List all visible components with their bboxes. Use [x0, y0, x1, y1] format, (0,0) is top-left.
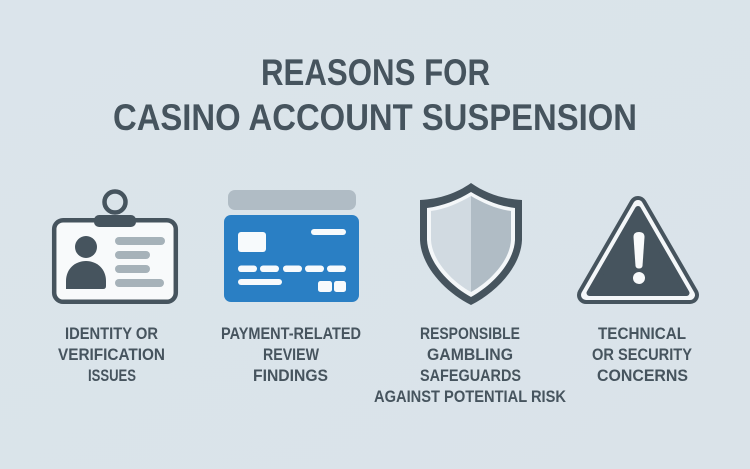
label: responsible gambling: GAMBLING: [427, 346, 513, 364]
icon: shield: [420, 183, 522, 305]
label: responsible gambling: AGAINST POTENTIAL RISK: [374, 388, 566, 406]
title: REASONS FOR: [261, 52, 490, 93]
title: [113, 52, 637, 138]
label: responsible gambling: [374, 325, 566, 406]
label: identity: ISSUES: [88, 367, 136, 385]
label: payment: PAYMENT-RELATED: [221, 325, 361, 343]
label: technical: [592, 325, 692, 385]
label: payment: [221, 325, 361, 385]
label: responsible gambling: SAFEGUARDS: [420, 367, 521, 385]
title: CASINO ACCOUNT SUSPENSION: [113, 97, 637, 138]
label: responsible gambling: RESPONSIBLE: [420, 325, 520, 343]
label: technical: TECHNICAL: [598, 325, 686, 343]
icon: payment card: [224, 190, 359, 302]
label: payment: REVIEW: [263, 346, 319, 364]
label: payment: FINDINGS: [253, 367, 328, 385]
icon: ID badge: [54, 192, 176, 302]
label: technical: OR SECURITY: [592, 346, 692, 364]
label: identity: IDENTITY OR: [65, 325, 158, 343]
label: technical: CONCERNS: [597, 367, 688, 385]
icon: warning triangle: [586, 205, 690, 295]
label: identity: VERIFICATION: [58, 346, 165, 364]
label: identity: [58, 325, 165, 385]
